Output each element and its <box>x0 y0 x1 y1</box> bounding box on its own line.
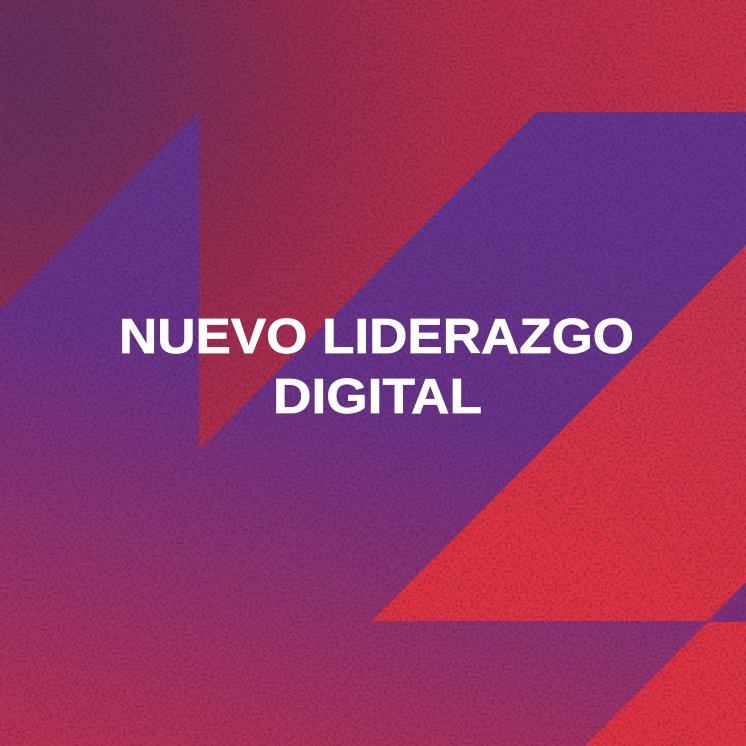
title <box>119 310 634 424</box>
red triangle right <box>372 245 746 621</box>
title line 1: NUEVO LIDERAZGO <box>119 310 634 364</box>
red triangle bottom right <box>585 622 746 746</box>
purple sliver <box>712 587 746 621</box>
title line 2: DIGITAL <box>273 370 482 424</box>
